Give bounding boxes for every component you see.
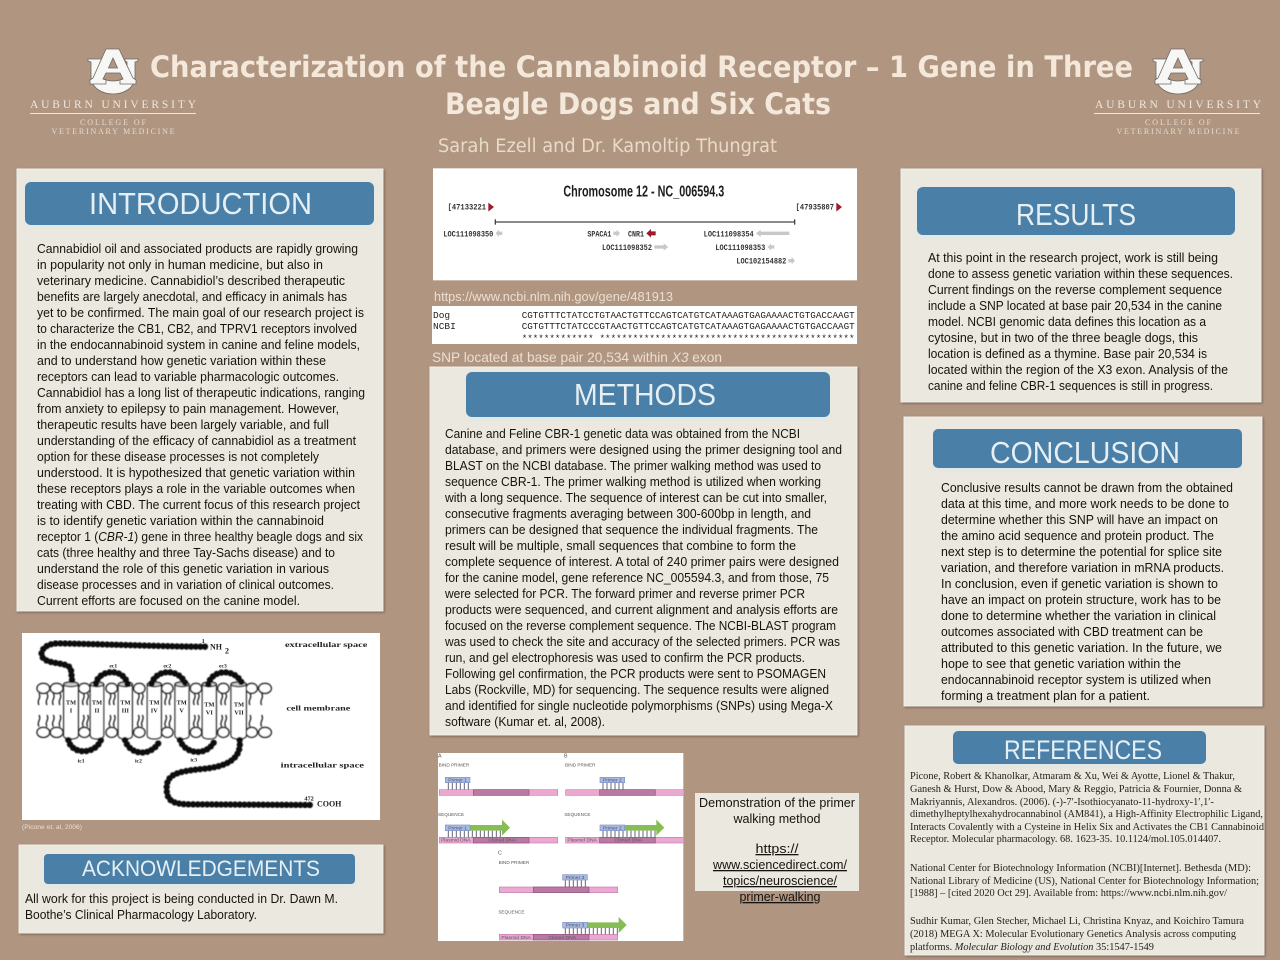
section C: Primer 3 bbox=[566, 923, 585, 929]
diagram labels: 2 bbox=[225, 647, 229, 656]
text: references list: Sudhir Kumar, Glen Stecher, Michael Li, Christina Knyaz, and Koichiro Tamura bbox=[910, 915, 1244, 927]
figure: sequence alignment: Dog bbox=[433, 310, 450, 321]
text: methods body: complete sequence of interest. A total of 240 primer pairs were designed bbox=[445, 554, 839, 569]
text: introduction body: receptors can lead to variable pharmacologic outcomes. bbox=[37, 369, 339, 384]
text: references list: Picone, Robert & Khanolkar, Atmaram & Xu, Wei & Ayotte, Lionel & Thakur, bbox=[910, 770, 1235, 782]
heading: acknowledgements: ACKNOWLEDGEMENTS bbox=[82, 856, 320, 881]
diagram labels: TM bbox=[66, 699, 76, 706]
section B: SEQUENCE bbox=[564, 812, 590, 817]
caption: SNP location: SNP located at base pair 20,534 within X3 exon bbox=[432, 349, 722, 365]
section A bbox=[438, 754, 558, 844]
diagram labels: COOH bbox=[317, 800, 342, 809]
heading: acknowledgements bbox=[44, 854, 355, 884]
text: conclusion body: outcomes associated with CBD treatment can be bbox=[941, 624, 1203, 639]
diagram labels: TM bbox=[149, 699, 159, 706]
icon: AU monogram left bbox=[88, 49, 138, 94]
panel: primer walking caption: walking method bbox=[733, 811, 820, 826]
panel: primer walking caption: topics/neuroscience/ bbox=[723, 873, 837, 888]
diagram labels: ec3 bbox=[219, 664, 227, 670]
figure: sequence alignment: ************* bbox=[522, 333, 594, 344]
text: introduction body: disease processes and in variation of clinical outcomes. bbox=[37, 577, 334, 592]
logo wordmark left: VETERINARY MEDICINE bbox=[52, 127, 175, 136]
text: conclusion body: data at this time, and more work needs to be done to bbox=[941, 496, 1229, 511]
figure: sequence alignment bbox=[432, 306, 857, 344]
text: methods body: with a long sequence. The sequence of interest can be cut into smaller, bbox=[444, 490, 827, 505]
text: methods body bbox=[444, 426, 842, 729]
text: introduction body: veterinary medicine. Cannabidiol’s described therapeutic bbox=[37, 273, 345, 288]
text: acknowledgements body: All work for this project is being conducted in Dr. Dawn M. bbox=[25, 891, 338, 906]
section B: Cloned DNA bbox=[614, 838, 643, 844]
diagram labels: ic1 bbox=[78, 758, 85, 764]
text: references list: Ganesh & Hurst, Dow & Abood, Mary & Reggio, Patricia & Fournier, Donna & bbox=[910, 783, 1242, 795]
diagram labels: intracellular space bbox=[281, 761, 365, 770]
text: conclusion body: have an impact on protein structure, work has to be bbox=[941, 592, 1221, 607]
lipid tails bbox=[38, 693, 262, 727]
text: methods body: focused on the reverse complement sequence. The NCBI-BLAST program bbox=[445, 618, 836, 633]
text: references list: (2018) MEGA X: Molecular Evolutionary Genetics Analysis across computing bbox=[910, 928, 1236, 940]
diagram labels: ic2 bbox=[135, 758, 142, 764]
text: references list: dimethylheptylhexahydrocannabinol (AM841), a High-Affinity Electrophilic Ligand, bbox=[910, 808, 1263, 820]
gene labels: LOC111098353 bbox=[715, 243, 765, 253]
panel: primer walking caption: www.sciencedirect.com/ bbox=[712, 857, 847, 872]
diagram labels: I bbox=[70, 707, 73, 714]
lipid heads bbox=[37, 683, 271, 737]
gene labels: CNR1 bbox=[628, 229, 644, 239]
heading: introduction: INTRODUCTION bbox=[89, 186, 312, 221]
text: references list: National Library of Medicine (US), National Center for Biotechnology Information; bbox=[910, 875, 1259, 887]
text: results body: At this point in the research project, work is still being bbox=[928, 250, 1218, 265]
panel: references bbox=[905, 726, 1264, 955]
section B: Primer 2 bbox=[603, 778, 622, 784]
text: references list: platforms. Molecular Biology and Evolution 35:1547-1549 bbox=[910, 941, 1154, 953]
panel: conclusion bbox=[904, 417, 1262, 706]
diagram labels: ec1 bbox=[109, 664, 117, 670]
figure: sequence alignment: CGTGTTTCTATCCCGTAACTGTTCCAGTCATGTCATAAAGTGAGAAAACTGTGACCAAGT bbox=[522, 321, 855, 332]
text: references list: Makriyannis, Alexandros. (2006). (-)-7′-Isothiocyanato-11-hydroxy-1′,1′- bbox=[910, 796, 1214, 808]
text: results body: model. NCBI genomic data defines this location as a bbox=[928, 314, 1207, 329]
section A: A bbox=[438, 754, 442, 760]
section B: B bbox=[564, 754, 568, 760]
diagram labels: ec2 bbox=[163, 664, 171, 670]
chromosome axis bbox=[495, 219, 795, 225]
logo: Auburn right bbox=[1094, 49, 1262, 136]
text: references list: Interacts Covalently with a Cysteine in Helix Six and Activates the CB1 Cannabinoid bbox=[910, 821, 1264, 833]
title: Beagle Dogs and Six Cats bbox=[445, 87, 831, 121]
text: introduction body: Current efforts are focused on the canine model. bbox=[37, 593, 300, 608]
diagram labels: TM bbox=[204, 701, 214, 708]
section A: BIND PRIMER bbox=[439, 763, 470, 768]
text: acknowledgements body: Boothe’s Clinical Pharmacology Laboratory. bbox=[25, 907, 257, 922]
diagram labels: NH bbox=[210, 643, 223, 652]
section C: SEQUENCE bbox=[498, 909, 524, 914]
gene labels: LOC102154882 bbox=[736, 257, 786, 267]
section A: Primer 1 bbox=[448, 825, 467, 831]
diagram labels: VI bbox=[206, 709, 213, 716]
figure: sequence alignment: ********************************************** bbox=[600, 333, 854, 344]
diagram labels: TM bbox=[120, 699, 130, 706]
text: results body: done to assess genetic variation within these sequences. bbox=[928, 266, 1233, 281]
text: references list: [1988] – [cited 2020 Oct 29]. Available from: https://www.ncbi.nlm.nih.gov/ bbox=[910, 887, 1228, 899]
caption: diagram source: (Picone et. al, 2006) bbox=[22, 824, 82, 831]
text: conclusion body: attributed to this genetic variation. In the future, we bbox=[941, 640, 1222, 655]
section C: C bbox=[498, 851, 502, 857]
text: conclusion body: endocannabinoid receptor system is utilized when bbox=[941, 672, 1211, 687]
text: conclusion body: hope to see that genetic variation within the bbox=[941, 656, 1181, 671]
text: conclusion body: In conclusion, even if genetic variation is shown to bbox=[941, 576, 1218, 591]
text: introduction body: yet to be confirmed. The main goal of our research project is bbox=[37, 305, 364, 320]
heading: introduction bbox=[25, 182, 374, 225]
authors: Sarah Ezell and Dr. Kamoltip Thungrat bbox=[438, 136, 777, 157]
section C: Plasmid DNA bbox=[501, 935, 532, 941]
section A: Primer 1 bbox=[448, 778, 467, 784]
text: introduction body: understand the role of this genetic variation in various bbox=[37, 561, 329, 576]
text: methods body: Following gel confirmation, the PCR products were sent to PSOMAGEN bbox=[445, 666, 826, 681]
text: acknowledgements body bbox=[25, 891, 338, 922]
text: methods body: software (Kumar et. al, 2008). bbox=[445, 714, 605, 729]
panel: primer walking caption bbox=[695, 793, 859, 904]
heading: conclusion bbox=[933, 429, 1242, 470]
section A: Cloned DNA bbox=[488, 838, 517, 844]
panel: methods bbox=[430, 367, 857, 735]
heading: results bbox=[917, 187, 1235, 235]
text: introduction body: cats (three healthy and three Tay-Sachs disease) and to bbox=[37, 545, 335, 560]
text: conclusion body: forming a treatment plan for a patient. bbox=[941, 688, 1150, 703]
caption: NCBI source: https://www.ncbi.nlm.nih.gov/gene/481913 bbox=[434, 289, 673, 304]
figure: primer walking bbox=[438, 753, 684, 941]
diagram labels: ic3 bbox=[190, 758, 197, 764]
text: results body: Current findings on the reverse complement sequence bbox=[928, 282, 1222, 297]
section B: Plasmid DNA bbox=[567, 838, 598, 844]
text: introduction body: option for these disease processes is not completely bbox=[37, 449, 319, 464]
text: methods body: products were sequenced, and current alignment and analysis efforts are bbox=[445, 602, 838, 617]
heading: references: REFERENCES bbox=[1004, 735, 1162, 765]
text: conclusion body: next step is to determine the potential for splice site bbox=[941, 544, 1222, 559]
text: methods body: run, and gel electrophoresis was used to confirm the PCR products. bbox=[445, 650, 805, 665]
text: introduction body: in the endocannabinoid system in canine and feline models, bbox=[37, 337, 360, 352]
text: introduction body: and to understand how genetic variation within these bbox=[37, 353, 326, 368]
logo wordmark right: AUBURN UNIVERSITY bbox=[1095, 99, 1262, 111]
diagram labels: III bbox=[122, 707, 130, 714]
section C: Cloned DNA bbox=[548, 935, 577, 941]
figure: chromosome map bbox=[433, 168, 857, 280]
figure: sequence alignment: CGTGTTTCTATCCTGTAACTGTTCCAGTCATGTCATAAAGTGAGAAAACTGTGACCAAGT bbox=[522, 310, 855, 321]
text: introduction body bbox=[37, 241, 365, 608]
text: introduction body: is to identify genetic variation within the cannabinoid bbox=[37, 513, 324, 528]
gene labels: SPACA1 bbox=[587, 229, 611, 239]
title: Characterization of the Cannabinoid Receptor – 1 Gene in Three bbox=[150, 50, 1133, 84]
diagram labels: IV bbox=[151, 707, 158, 714]
text: results body: include a SNP located at base pair 20,534 in the canine bbox=[928, 298, 1222, 313]
panel: primer walking caption: https:// bbox=[756, 841, 799, 856]
transmembrane helices bbox=[64, 682, 246, 739]
panel: primer walking caption: Demonstration of the primer bbox=[699, 795, 856, 810]
range markers: [47133221 bbox=[448, 203, 486, 213]
panel: acknowledgements bbox=[19, 845, 383, 933]
text: references list: National Center for Biotechnology Information (NCBI)[Internet]. Bethesda (MD): bbox=[910, 862, 1251, 874]
figure: chromosome map: Chromosome 12 - NC_006594.3 bbox=[563, 184, 724, 201]
text: methods body: for the canine model, gene reference NC_005594.3, and from those, 75 bbox=[445, 570, 829, 585]
amino acid chain bbox=[41, 643, 313, 805]
text: methods body: BLAST on the NCBI database. The primer walking method was used to bbox=[445, 458, 821, 473]
logo wordmark right bbox=[1094, 99, 1262, 136]
icon: AU monogram right bbox=[1153, 49, 1203, 94]
text: introduction body: understanding of the efficacy of cannabidiol as a treatment bbox=[37, 433, 356, 448]
text: methods body: was used to check the site and accuracy of the selected primers. PCR was bbox=[444, 634, 840, 649]
section A: SEQUENCE bbox=[438, 812, 464, 817]
section C bbox=[498, 851, 627, 941]
heading: methods bbox=[466, 372, 830, 417]
text: introduction body: these receptors plays a role in the variable outcomes when bbox=[37, 481, 355, 496]
text: introduction body: understood. It is hypothesized that genetic variation within bbox=[37, 465, 355, 480]
diagram labels: 472 bbox=[304, 795, 314, 802]
diagram labels: VII bbox=[234, 709, 244, 716]
section C: Primer 3 bbox=[566, 875, 585, 881]
gene labels bbox=[443, 229, 786, 267]
text: conclusion body bbox=[941, 480, 1233, 703]
text: methods body: Labs (Rockville, MD) for sequencing. The sequence results were aligned bbox=[445, 682, 829, 697]
diagram labels: 1 bbox=[202, 638, 205, 645]
text: results body bbox=[928, 250, 1233, 393]
diagram labels: TM bbox=[177, 699, 187, 706]
diagram labels: extracellular space bbox=[285, 640, 368, 649]
diagram labels: TM bbox=[234, 701, 244, 708]
text: results body: canine and feline CBR-1 sequences is still in progress. bbox=[928, 378, 1213, 393]
diagram labels: II bbox=[95, 707, 100, 714]
text: introduction body: receptor 1 (CBR-1) gene in three healthy beagle dogs and six bbox=[37, 529, 363, 544]
logo wordmark left: COLLEGE OF bbox=[80, 118, 147, 127]
logo wordmark right: COLLEGE OF bbox=[1145, 118, 1212, 127]
diagram labels: TM bbox=[92, 699, 102, 706]
text: introduction body: to characterize the CB1, CB2, and TPRV1 receptors involved bbox=[37, 321, 357, 336]
gene arrows bbox=[496, 230, 795, 264]
text: methods body: consecutive fragments averaging between 300-600bp in length, and bbox=[445, 506, 811, 521]
section A: Plasmid DNA bbox=[441, 838, 471, 844]
diagram labels bbox=[66, 638, 368, 809]
text: conclusion body: determine whether this SNP will have an impact on bbox=[941, 512, 1218, 527]
panel: results bbox=[901, 169, 1261, 402]
text: introduction body: treating with CBD. The current focus of this research project bbox=[37, 497, 360, 512]
text: references list: Receptor. Molecular pharmacology. 68. 1623-35. 10.1124/mol.105.014407. bbox=[910, 833, 1221, 845]
diagram: CB1 receptor bbox=[22, 633, 380, 820]
text: results body: located within the region of the X3 exon. Analysis of the bbox=[928, 362, 1228, 377]
range markers: [47935807 bbox=[796, 203, 834, 213]
gene labels: LOC111098354 bbox=[704, 229, 754, 239]
text: conclusion body: variation, and therefore variation in mRNA products. bbox=[941, 560, 1224, 575]
text: introduction body: therapeutic results have been largely variable, and full bbox=[37, 417, 329, 432]
gene labels: LOC111098350 bbox=[443, 229, 493, 239]
text: conclusion body: the amino acid sequence and protein product. The bbox=[941, 528, 1214, 543]
logo wordmark left: AUBURN UNIVERSITY bbox=[30, 99, 197, 111]
section B: BIND PRIMER bbox=[565, 763, 596, 768]
text: introduction body: benefits are largely anecdotal, and efficacy in animals has bbox=[37, 289, 347, 304]
text: results body: location is defined as a thymine. Base pair 20,534 is bbox=[928, 346, 1207, 361]
text: conclusion body: done to determine whether the variation in clinical bbox=[941, 608, 1216, 623]
text: methods body: were selected for PCR. The forward primer and reverse primer PCR bbox=[444, 586, 805, 601]
diagram labels: V bbox=[179, 707, 184, 714]
figure: sequence alignment: NCBI bbox=[433, 321, 456, 332]
text: introduction body: from anxiety to epilepsy to pain management. However, bbox=[37, 401, 339, 416]
text: results body: cytosine, but in two of the three beagle dogs, this bbox=[928, 330, 1198, 345]
text: references list bbox=[910, 770, 1264, 953]
heading: results: RESULTS bbox=[1016, 197, 1136, 232]
section C: BIND PRIMER bbox=[499, 860, 530, 865]
logo wordmark right: VETERINARY MEDICINE bbox=[1116, 127, 1240, 136]
text: methods body: and identified for single nucleotide polymorphisms (SNPs) using Mega-X bbox=[445, 698, 833, 713]
text: methods body: database, and primers were designed using the primer designing tool and bbox=[445, 442, 842, 457]
section B bbox=[564, 754, 684, 844]
gene labels: LOC111098352 bbox=[602, 243, 652, 253]
diagram labels: cell membrane bbox=[286, 703, 351, 712]
heading: methods: METHODS bbox=[574, 377, 716, 412]
text: methods body: Canine and Feline CBR-1 genetic data was obtained from the NCBI bbox=[445, 426, 800, 441]
panel: primer walking caption: primer-walking bbox=[740, 889, 820, 904]
text: introduction body: Cannabidiol oil and associated products are rapidly growing bbox=[37, 241, 358, 256]
logo: Auburn left bbox=[30, 49, 197, 136]
text: methods body: primers can be designed that sequence the individual fragments. The bbox=[445, 522, 818, 537]
text: introduction body: Cannabidiol has a long list of therapeutic indications, ranging bbox=[37, 385, 365, 400]
text: introduction body: in popularity not only in human medicine, but also in bbox=[37, 257, 323, 272]
text: methods body: sequence CBR-1. The primer walking method is utilized when working bbox=[445, 474, 821, 489]
range markers bbox=[448, 203, 834, 213]
title bbox=[150, 50, 1133, 121]
heading: conclusion: CONCLUSION bbox=[990, 435, 1180, 470]
panel: introduction bbox=[17, 169, 383, 611]
logo wordmark left bbox=[30, 99, 197, 136]
text: conclusion body: Conclusive results cannot be drawn from the obtained bbox=[941, 480, 1233, 495]
section B: Primer 2 bbox=[603, 825, 622, 831]
text: methods body: result will be multiple, small sequences that combine to form the bbox=[445, 538, 796, 553]
heading: references bbox=[953, 731, 1206, 765]
